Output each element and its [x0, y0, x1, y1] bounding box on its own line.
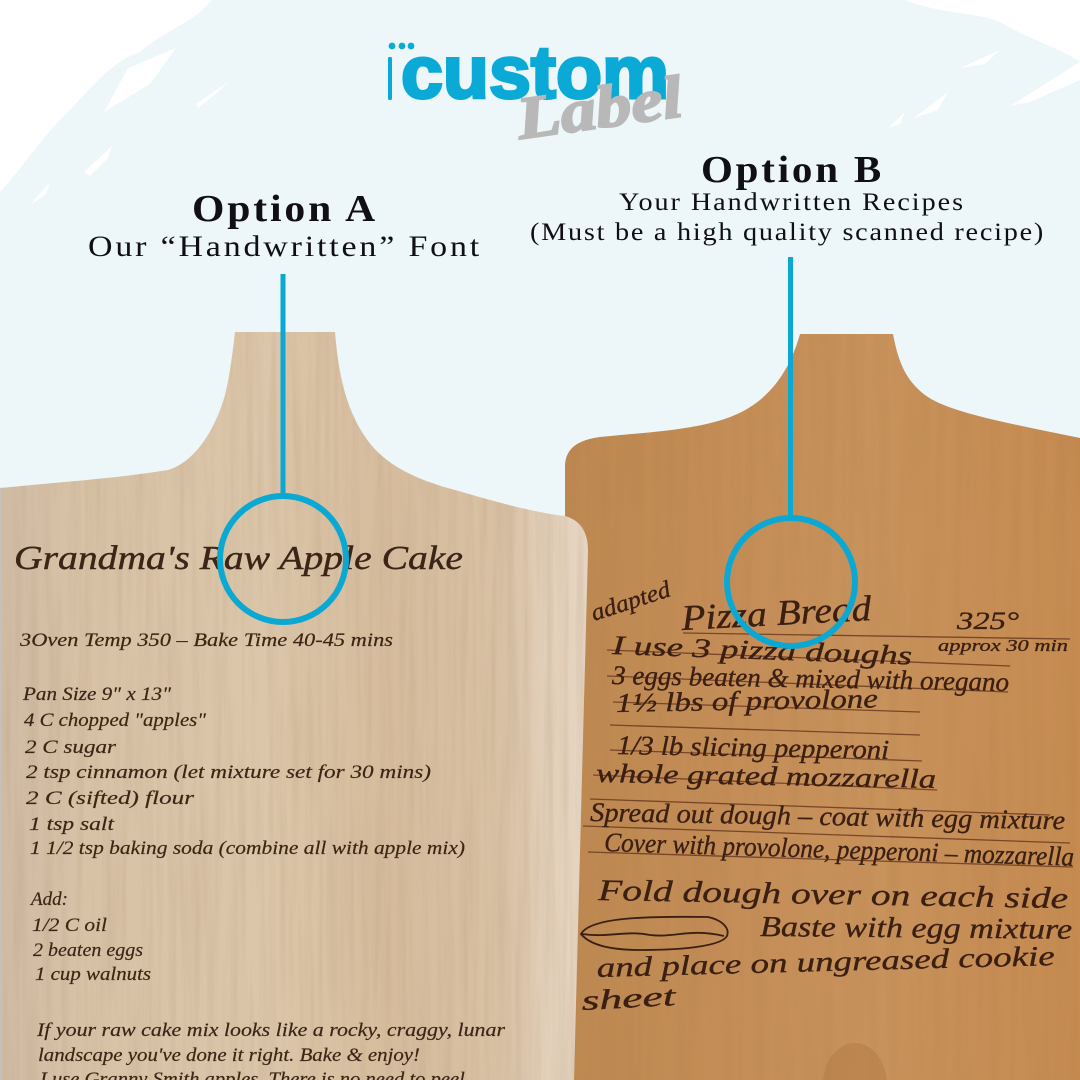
heading: Option B	[530, 149, 1045, 246]
heading: Option B: Option B	[701, 149, 884, 191]
handwritten recipe B: adapted	[588, 576, 675, 627]
handwritten recipe B: Spread out dough – coat with egg mixture	[590, 797, 1065, 835]
panel: left board, Option A	[0, 330, 590, 1080]
recipe text A: If your raw cake mix looks like a rocky, craggy, lunar	[36, 1020, 506, 1041]
connector: Option A line and circle	[220, 274, 346, 622]
recipe text A: 2 tsp cinnamon (let mixture set for 30 mins)	[26, 762, 431, 783]
recipe title: Grandma's Raw Apple Cake	[14, 540, 463, 577]
recipe text A: 3Oven Temp 350 – Bake Time 40-45 mins	[19, 630, 393, 651]
bread sketch	[581, 917, 728, 950]
heading: Option A: Our “Handwritten” Font	[88, 230, 482, 263]
handwritten recipe B: 325°	[956, 608, 1019, 635]
heading: Option A	[88, 188, 482, 263]
recipe text A: Pan Size 9" x 13"	[22, 684, 172, 705]
recipe text A: 4 C chopped "apples"	[24, 710, 207, 731]
heading: Option A: Option A	[192, 188, 378, 230]
recipe text A	[19, 630, 506, 1080]
recipe text A: landscape you've done it right. Bake & enjoy!	[38, 1045, 420, 1066]
panel: right board, Option B	[560, 330, 1080, 1080]
connector: Option B line and circle	[727, 257, 855, 646]
recipe text A: 2 beaten eggs	[33, 940, 143, 961]
logo word: custom: custom	[401, 31, 669, 114]
logo word: Label: Label	[511, 63, 687, 152]
recipe text A: 2 C sugar	[25, 737, 117, 758]
logo: iCustom Label	[388, 31, 687, 152]
recipe text A: 1 tsp salt	[29, 814, 115, 835]
handwritten recipe B: sheet	[581, 981, 678, 1017]
ruled lines	[583, 633, 1073, 867]
board shape	[0, 330, 590, 1080]
handwritten recipe B: and place on ungreased cookie	[596, 941, 1055, 984]
recipe text A: 1 1/2 tsp baking soda (combine all with apple mix)	[30, 838, 465, 859]
handwritten recipe B: 3 eggs beaten & mixed with oregano	[611, 660, 1009, 697]
handwritten recipe B: Baste with egg mixture	[760, 911, 1072, 946]
handwritten recipe B: Fold dough over on each side	[597, 874, 1068, 915]
handwritten recipe B: 1/3 lb slicing pepperoni	[617, 730, 889, 765]
handwritten recipe B: whole grated mozzarella	[596, 758, 936, 794]
logo dots	[389, 43, 414, 49]
logo bar	[388, 57, 392, 100]
handwritten recipe B: Pizza Bread	[679, 588, 873, 638]
heading: Option B: (Must be a high quality scanned recipe)	[530, 219, 1045, 246]
handwritten recipe B: 1½ lbs of provolone	[616, 683, 878, 718]
board shape	[560, 330, 1080, 1080]
handwritten recipe B: I use 3 pizza doughs	[610, 630, 913, 670]
recipe text A: 1 cup walnuts	[35, 964, 151, 985]
recipe text A: 1/2 C oil	[32, 915, 107, 936]
recipe text A: Add:	[29, 889, 68, 910]
handwritten recipe B	[581, 576, 1075, 1017]
handwritten recipe B: approx 30 min	[938, 636, 1068, 655]
heading: Option B: Your Handwritten Recipes	[619, 189, 965, 216]
recipe text A: 2 C (sifted) flour	[26, 788, 195, 809]
